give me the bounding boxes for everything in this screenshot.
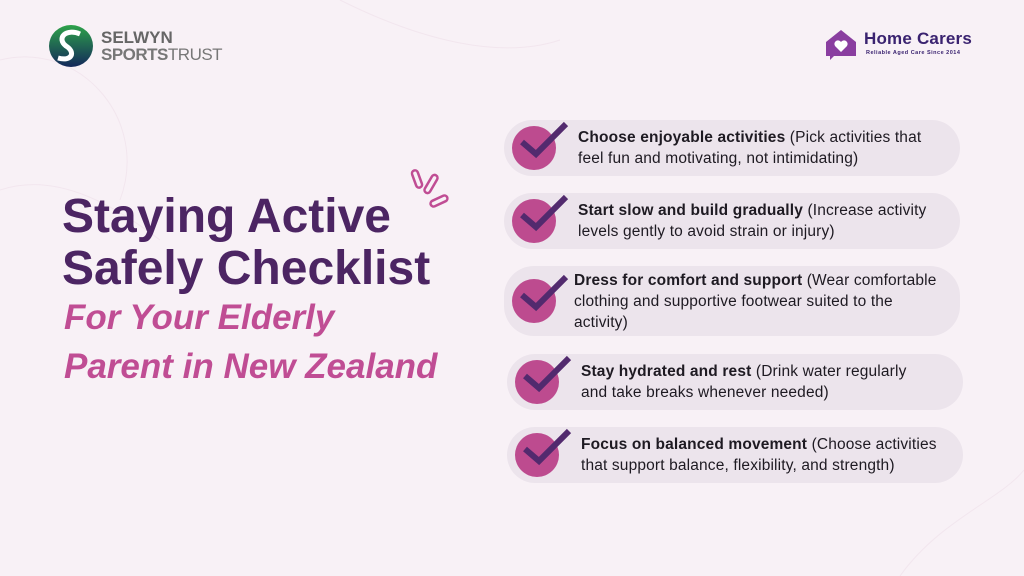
checklist item 3: Dress for comfort and support (Wear comfortable <box>574 272 936 289</box>
checklist item 5: Focus on balanced movement (Choose activities <box>581 436 937 453</box>
checklist item 5: that support balance, flexibility, and strength) <box>581 457 895 474</box>
checklist item 5 <box>507 427 963 483</box>
checklist item 3: clothing and supportive footwear suited to the <box>574 293 893 310</box>
title: Safely Checklist <box>62 242 430 295</box>
checklist item 2: Start slow and build gradually (Increase activity <box>578 202 926 219</box>
subtitle: For Your Elderly <box>64 298 334 337</box>
subtitle: Parent in New Zealand <box>64 347 437 386</box>
checklist item 2 <box>504 193 960 249</box>
checklist item 3: activity) <box>574 314 628 331</box>
logo: Home Carers <box>826 29 972 60</box>
checklist item 4: Stay hydrated and rest (Drink water regularly <box>581 363 906 380</box>
logo: Selwyn Sports Trust <box>49 25 222 67</box>
checklist item 2: levels gently to avoid strain or injury) <box>578 223 835 240</box>
subtitle <box>64 298 438 386</box>
checklist item 4: and take breaks whenever needed) <box>581 384 829 401</box>
title: Staying Active <box>62 190 391 243</box>
checklist item 1: feel fun and motivating, not intimidating) <box>578 150 858 167</box>
icon: sparkle accent <box>410 169 449 208</box>
title <box>62 190 430 295</box>
checklist item 1: Choose enjoyable activities (Pick activities that <box>578 129 921 146</box>
logo: Selwyn Sports Trust: SELWYN <box>101 28 173 47</box>
checklist item 4 <box>507 354 963 410</box>
checklist item 1 <box>504 120 960 176</box>
checklist item 3 <box>504 266 960 336</box>
logo: Selwyn Sports Trust: SPORTSTRUST <box>101 45 222 64</box>
logo: Home Carers: Home Carers <box>864 29 972 48</box>
logo: Home Carers: Reliable Aged Care Since 2014 <box>866 50 960 56</box>
